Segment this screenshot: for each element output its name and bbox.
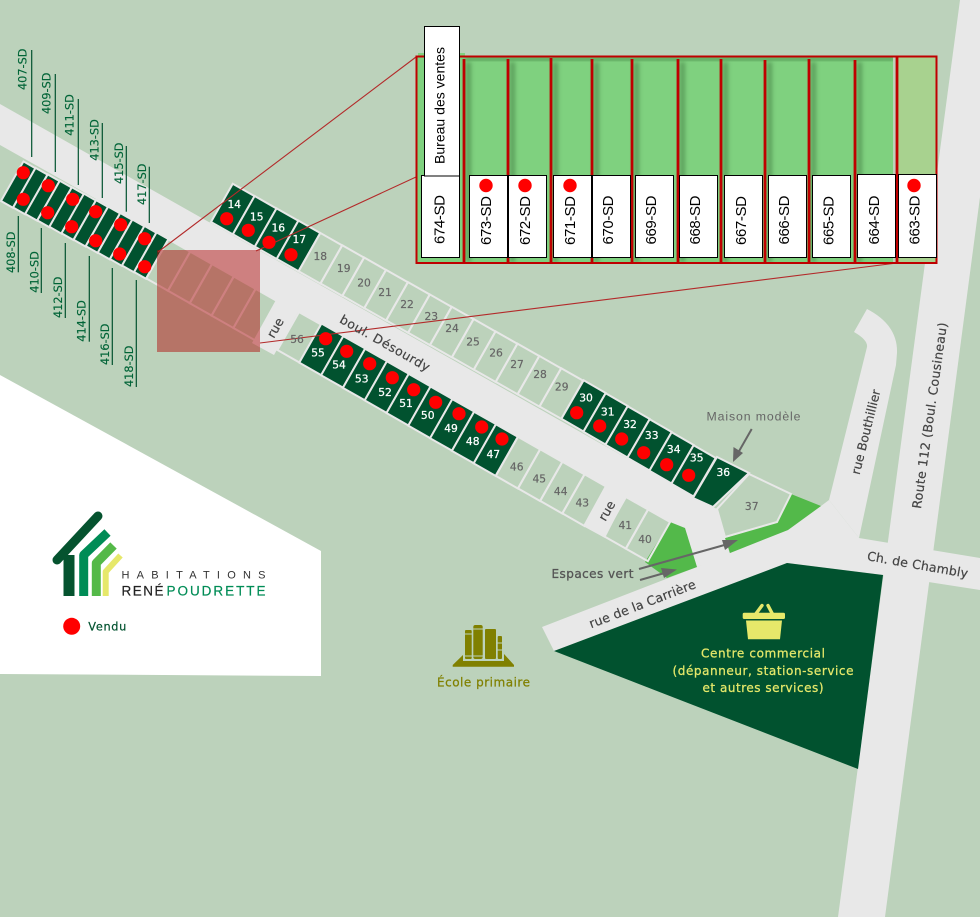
inset lot labels: 673-SD: [478, 196, 495, 245]
sold lot numbers: 49: [444, 422, 458, 435]
inset lot labels: 667-SD: [733, 196, 750, 245]
label: Maison modèle: Maison modèle: [706, 410, 801, 424]
available lot numbers: 56: [290, 333, 304, 346]
sold lot numbers: 32: [623, 418, 637, 431]
sold lot numbers: 35: [690, 452, 704, 464]
lot codes left row: 414-SD: [76, 300, 88, 342]
available lot numbers: 41: [618, 519, 632, 532]
available lots 18 to 29: [299, 233, 583, 419]
available lot numbers: [290, 250, 759, 546]
sold lot numbers: 48: [466, 435, 480, 448]
street names: Route 112 (Boul. Cousineau): [909, 321, 950, 510]
logo house mark: [57, 516, 120, 596]
legend: Vendu: [63, 618, 126, 635]
sold lot numbers: 52: [378, 386, 392, 399]
inset dividers: [464, 56, 897, 262]
available lot numbers: 18: [313, 250, 327, 263]
logo: Habitations René Poudrette: [57, 516, 266, 599]
available lot numbers: 27: [510, 358, 524, 371]
available lot numbers: 44: [554, 485, 568, 498]
street names: rue de la Carrière: [587, 576, 698, 631]
available lot numbers: 45: [532, 472, 546, 486]
white legend area: [0, 375, 321, 676]
inset lot labels: Bureau des ventes: [432, 47, 448, 164]
model home lot 36: [693, 457, 749, 507]
sold lot numbers: 31: [601, 406, 615, 418]
available lots 40 to 46: [496, 437, 670, 561]
logo wordmark: POUDRETTE: [166, 584, 266, 599]
available lot numbers: 19: [337, 262, 351, 275]
inset lot labels: 670-SD: [600, 195, 617, 244]
green spaces: [645, 494, 821, 578]
sold lot numbers: 54: [332, 358, 346, 372]
inset lot labels: 663-SD: [906, 195, 924, 244]
inset lot boxes: [422, 26, 936, 258]
highlighted square: [157, 250, 260, 352]
street names: [263, 312, 970, 631]
lot 37: [717, 474, 791, 537]
lot codes left row: 412-SD: [52, 276, 65, 318]
street names: Ch. de Chambly: [866, 548, 970, 581]
street names: rue: [263, 315, 287, 340]
logo wordmark: [122, 569, 266, 599]
available lot numbers: 37: [745, 500, 759, 513]
street names: rue: [595, 498, 618, 523]
lot codes left row: 417-SD: [136, 163, 149, 205]
sold lot numbers: 30: [579, 392, 593, 404]
available lot numbers: 21: [378, 286, 392, 299]
leader lines for lot codes: [18, 50, 149, 387]
lot codes left row: 415-SD: [113, 142, 126, 184]
label: Centre commercial: et autres services): [702, 681, 824, 695]
sold lot numbers: 47: [486, 448, 500, 461]
sold lot numbers: 55: [311, 346, 325, 360]
inset outline: [416, 56, 936, 263]
inset lot labels: 664-SD: [866, 195, 883, 244]
arrow: Maison modèle: [733, 429, 752, 462]
lot codes left row: 407-SD: [16, 48, 30, 90]
sold lots 47 to 55: [299, 324, 518, 476]
sold lot numbers: 16: [271, 222, 285, 234]
inset sold markers: [479, 179, 921, 192]
arrows: Espaces vert: [639, 540, 738, 580]
inset lot labels: [432, 47, 924, 245]
available lot numbers: 26: [489, 346, 503, 360]
inset panel: lots 663-SD to 674-SD: [416, 26, 937, 263]
sold lot numbers: 17: [292, 233, 306, 246]
lot codes left row: 413-SD: [88, 119, 102, 161]
left row of lots 407-SD to 418-SD: [1, 161, 168, 279]
inset lot labels: 668-SD: [687, 195, 704, 244]
book bands: [465, 629, 502, 656]
inset lot labels: 669-SD: [643, 195, 660, 244]
available lot 56: [277, 311, 322, 362]
icon: school books: [453, 625, 514, 667]
label: Centre commercial: (dépanneur, station-service: [672, 664, 854, 678]
available lot numbers: 46: [510, 460, 524, 474]
sold lot numbers: 15: [250, 210, 264, 224]
available lot numbers: 24: [445, 322, 459, 335]
available lot numbers: 22: [400, 298, 414, 311]
label: Espaces vert: Espaces vert: [552, 567, 634, 581]
available lot numbers: 20: [357, 276, 371, 290]
available lot numbers: 23: [424, 310, 438, 323]
sold lot numbers: 53: [355, 372, 369, 386]
lot codes left row: 410-SD: [28, 251, 42, 293]
inset lot labels: 674-SD: [432, 195, 448, 244]
inset lot labels: 671-SD: [562, 196, 579, 245]
logo wordmark: RENÉ: [122, 584, 164, 599]
upper row of lots 14 to 37: [211, 184, 791, 537]
lot codes left row: 416-SD: [99, 323, 112, 365]
available lot numbers: 25: [466, 336, 480, 348]
lots under the highlighted square: [146, 239, 277, 340]
street names: rue Bouthillier: [849, 387, 884, 476]
lot codes left row: 411-SD: [64, 94, 76, 136]
sold lot numbers: [227, 198, 730, 479]
label: Centre commercial: [672, 646, 854, 695]
icon: shopping basket: [743, 606, 785, 639]
sold markers on map: [17, 166, 695, 482]
label: École primaire: École primaire: [437, 674, 530, 690]
sold lot numbers: 36: [716, 466, 730, 479]
inset lot labels: 665-SD: [820, 196, 838, 245]
available lot numbers: 40: [638, 533, 652, 546]
legend: Vendu: Vendu: [88, 621, 126, 634]
label: Centre commercial: Centre commercial: [701, 646, 825, 660]
sold lots 14 to 17: [211, 184, 320, 271]
available lot numbers: 43: [575, 496, 589, 510]
inset lot labels: 666-SD: [776, 195, 793, 244]
inset shadows: [465, 57, 895, 262]
available lot numbers: 28: [533, 368, 547, 381]
sold lot numbers: 51: [399, 397, 413, 410]
lot codes left row: 418-SD: [123, 345, 136, 387]
sold lots 30 to 35: [561, 380, 716, 497]
lower row of lots 40 to 56: [277, 311, 670, 561]
sold lot numbers: 50: [421, 409, 435, 422]
shopping centre block: [554, 563, 883, 769]
lot codes left row: 409-SD: [40, 72, 54, 114]
available lot numbers: 29: [555, 380, 569, 394]
sold lot numbers: 14: [227, 198, 241, 211]
logo wordmark: HABITATIONS: [122, 569, 266, 581]
inset lot labels: 672-SD: [517, 196, 534, 245]
lot codes left row: [5, 48, 149, 387]
sold lot numbers: 34: [667, 443, 681, 456]
zoom connector lines: [158, 57, 897, 343]
sold lot numbers: 33: [645, 429, 659, 442]
lot codes left row: 408-SD: [5, 231, 18, 273]
street names: boul. Désourdy: [337, 312, 433, 375]
inset lawn: [417, 57, 893, 262]
